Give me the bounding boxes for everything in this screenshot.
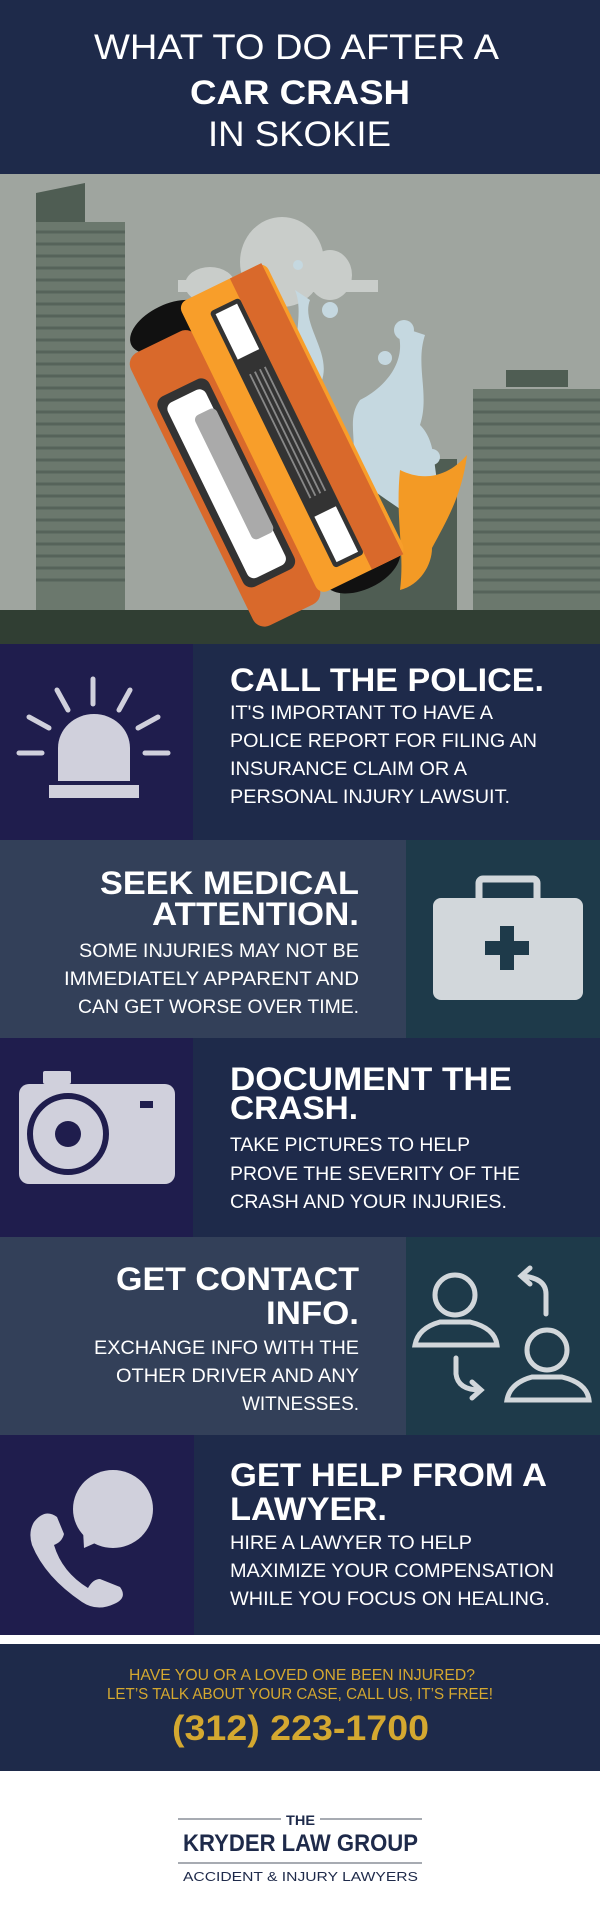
flames	[399, 455, 467, 590]
body text: CAN GET WORSE OVER TIME.	[78, 997, 359, 1018]
call to action	[0, 1644, 600, 1771]
ground	[0, 610, 600, 644]
logo	[178, 1812, 422, 1884]
heading: LAWYER.	[230, 1491, 387, 1527]
step 5: get help from a lawyer	[0, 1435, 600, 1635]
body text: PROVE THE SEVERITY OF THE	[230, 1164, 520, 1185]
icon: siren	[19, 679, 168, 798]
step 4: get contact info	[0, 1237, 600, 1435]
body text: IMMEDIATELY APPARENT AND	[64, 969, 359, 990]
body text: PERSONAL INJURY LAWSUIT.	[230, 787, 510, 808]
heading: CRASH.	[230, 1090, 358, 1126]
heading	[230, 1061, 512, 1126]
heading: ATTENTION.	[152, 896, 359, 932]
icon: medical kit	[433, 879, 583, 1000]
logo: KRYDER LAW GROUP	[183, 1830, 418, 1857]
call to action: HAVE YOU OR A LOVED ONE BEEN INJURED?	[129, 1667, 475, 1684]
smoke	[293, 260, 445, 525]
title: WHAT TO DO AFTER A	[94, 28, 500, 67]
icon: camera	[19, 1071, 175, 1184]
heading	[100, 865, 359, 932]
heading	[116, 1261, 359, 1331]
body text	[230, 1533, 554, 1610]
phone number: (312) 223-1700	[172, 1709, 429, 1748]
left building	[36, 183, 125, 610]
body text: EXCHANGE INFO WITH THE	[94, 1338, 359, 1359]
body text: CRASH AND YOUR INJURIES.	[230, 1192, 507, 1213]
body text: IT'S IMPORTANT TO HAVE A	[230, 703, 493, 724]
illustration: overturned car in city	[0, 174, 600, 644]
title: IN SKOKIE	[208, 115, 391, 154]
body text	[230, 1135, 520, 1213]
header band	[0, 0, 600, 174]
icon: contacts exchange	[415, 1268, 589, 1400]
icon: phone with speech bubble	[30, 1470, 153, 1608]
cloud	[178, 217, 378, 307]
body text: SOME INJURIES MAY NOT BE	[79, 941, 359, 962]
body text: MAXIMIZE YOUR COMPENSATION	[230, 1561, 554, 1582]
title	[94, 28, 500, 154]
heading: SEEK MEDICAL	[100, 865, 359, 901]
heading: DOCUMENT THE	[230, 1061, 512, 1097]
heading: GET CONTACT	[116, 1261, 359, 1297]
right building	[473, 370, 600, 610]
mid building	[340, 459, 457, 610]
body text: INSURANCE CLAIM OR A	[230, 759, 467, 780]
body text: WITNESSES.	[242, 1394, 359, 1415]
body text	[64, 941, 359, 1018]
step 2: seek medical attention	[0, 840, 600, 1038]
title: CAR CRASH	[190, 74, 410, 112]
heading	[230, 1457, 547, 1527]
body text: POLICE REPORT FOR FILING AN	[230, 731, 537, 752]
body text: HIRE A LAWYER TO HELP	[230, 1533, 472, 1554]
body text: OTHER DRIVER AND ANY	[116, 1366, 359, 1387]
body text: TAKE PICTURES TO HELP	[230, 1135, 470, 1156]
logo: ACCIDENT & INJURY LAWYERS	[183, 1869, 418, 1884]
heading: CALL THE POLICE.	[230, 662, 544, 698]
logo: THE	[286, 1812, 315, 1828]
step 3: document the crash	[0, 1038, 600, 1237]
body text	[230, 703, 537, 808]
heading: INFO.	[266, 1295, 359, 1331]
body text: WHILE YOU FOCUS ON HEALING.	[230, 1589, 550, 1610]
car	[112, 257, 413, 640]
body text	[94, 1338, 359, 1415]
call to action: LET’S TALK ABOUT YOUR CASE, CALL US, IT’S FREE!	[107, 1686, 493, 1703]
step 1: call the police	[0, 644, 600, 840]
heading: GET HELP FROM A	[230, 1457, 547, 1493]
